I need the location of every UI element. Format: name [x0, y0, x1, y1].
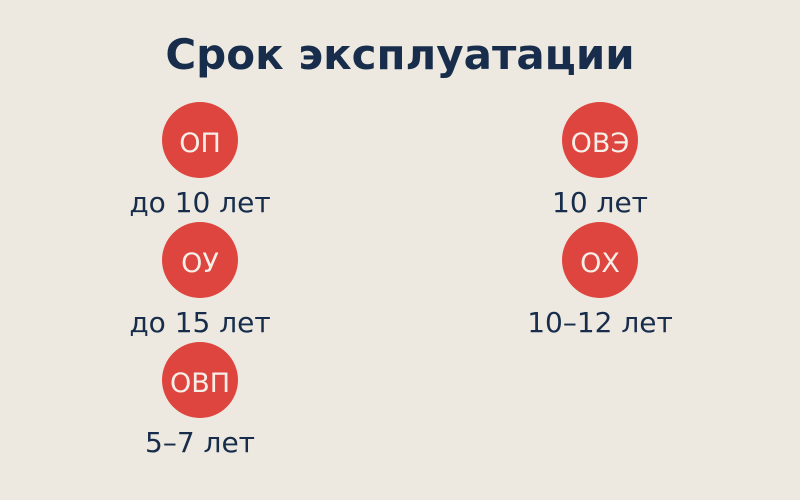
- icon: circle ОХ: [562, 222, 638, 298]
- label: ОУ: до 15 лет: [129, 306, 271, 339]
- item: ОП: [129, 102, 271, 219]
- icon: circle ОУ: ОУ: [181, 248, 219, 279]
- label: ОВП: 5–7 лет: [145, 426, 255, 459]
- label: ОП: до 10 лет: [129, 186, 271, 219]
- icon: circle ОП: [162, 102, 238, 178]
- icon: circle ОВП: ОВП: [170, 368, 230, 399]
- icon: circle ОВП: [162, 342, 238, 418]
- item: ОВЭ: [552, 102, 648, 219]
- label: ОВЭ: 10 лет: [552, 186, 648, 219]
- icon: circle ОХ: ОХ: [580, 248, 620, 279]
- item: ОУ: [129, 222, 271, 339]
- label: ОХ: 10–12 лет: [527, 306, 673, 339]
- icon: circle ОП: ОП: [179, 128, 221, 159]
- icon: circle ОВЭ: ОВЭ: [571, 128, 629, 159]
- item: ОХ: [527, 222, 673, 339]
- item: ОВП: [145, 342, 255, 459]
- title: Срок эксплуатации: [165, 30, 635, 79]
- icon: circle ОВЭ: [562, 102, 638, 178]
- icon: circle ОУ: [162, 222, 238, 298]
